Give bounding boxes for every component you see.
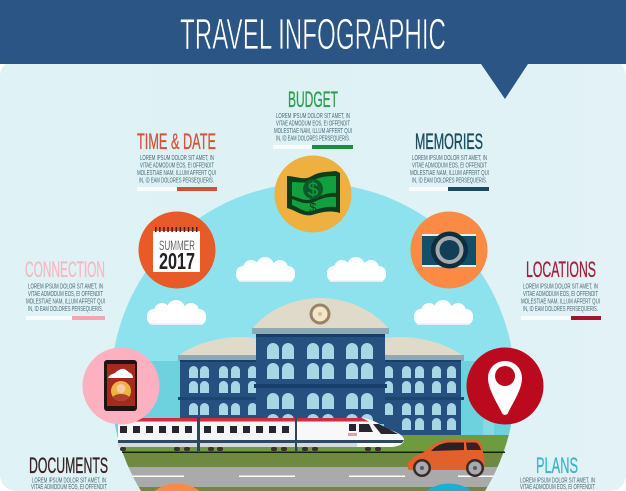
right wing — [380, 337, 464, 435]
lorem text: memories: LOREM IPSUM DOLOR SIT AMET, IN — [412, 153, 487, 162]
time and date block — [137, 129, 217, 191]
header pointer — [481, 64, 528, 99]
heading: documents: DOCUMENTS — [29, 453, 108, 478]
locations block — [521, 257, 601, 320]
lorem text: memories — [410, 153, 489, 184]
icon: plans circle — [426, 484, 472, 491]
lorem text: connection: LOREM IPSUM DOLOR SIT AMET, IN — [28, 282, 103, 290]
rule: connection — [26, 316, 105, 320]
lorem text: connection: MOLESTIAE NAM, ILLUM AFFERT QUI — [26, 296, 105, 306]
icon: location pin — [466, 348, 544, 424]
connection block — [25, 257, 105, 320]
lorem text: budget: LOREM IPSUM DOLOR SIT AMET, IN — [276, 111, 350, 120]
station building — [178, 298, 464, 435]
plans block — [520, 453, 595, 491]
rule: time and date — [137, 187, 217, 191]
icon: calendar: SUMMER — [159, 238, 195, 253]
icon: phone — [82, 348, 160, 424]
lorem text: locations — [521, 282, 600, 313]
train windows — [120, 424, 398, 434]
central block — [252, 298, 389, 430]
lorem text: time and date: VITAE ADMODUM EOS, EI OFFENDIT — [140, 160, 214, 170]
lorem text: budget: MOLESTIAE NAM, ILLUM AFFERT QUI — [274, 126, 352, 135]
rule: locations — [521, 316, 601, 320]
lorem text: time and date: MOLESTIAE NAM, ILLUM AFFERT QUI — [137, 168, 216, 177]
lorem text: memories: MOLESTIAE NAM, ILLUM AFFERT QUI — [410, 168, 489, 177]
heading: memories: MEMORIES — [415, 129, 483, 154]
heading: plans: PLANS — [536, 453, 578, 478]
documents block — [29, 453, 108, 491]
heading: connection: CONNECTION — [25, 257, 105, 282]
icon: camera — [410, 212, 488, 288]
left wing — [178, 337, 260, 420]
cloud 3 — [327, 257, 386, 282]
lorem text: budget: IN, ID EAM DOLORES PERSEQUERIS. — [276, 134, 350, 142]
lorem text: budget — [274, 111, 352, 142]
lorem text: connection: VITAE ADMODUM EOS, EI OFFENDIT — [28, 289, 103, 298]
rule: budget — [273, 145, 353, 149]
icon: money — [274, 156, 352, 232]
lorem text: documents: LOREM IPSUM DOLOR SIT AMET, IN — [32, 476, 106, 484]
icon: calendar: 2017 — [159, 248, 195, 274]
icon: money: $ — [308, 180, 319, 201]
memories block — [409, 129, 489, 191]
rule: memories — [409, 187, 489, 191]
cloud 2 — [147, 300, 206, 325]
icon: documents circle — [154, 484, 200, 491]
train — [118, 418, 404, 451]
lorem text: time and date: IN, ID EAM DOLORES PERSEQUERIS. — [139, 176, 214, 184]
icon: money: $ — [309, 200, 317, 215]
ground and road — [100, 435, 530, 491]
bogies — [120, 447, 381, 451]
clock — [310, 304, 330, 324]
lorem text: connection: IN, ID EAM DOLORES PERSEQUERIS. — [28, 304, 103, 313]
lorem text: memories: IN, ID EAM DOLORES PERSEQUERIS. — [412, 176, 487, 184]
lorem text: documents — [31, 476, 107, 491]
budget block — [273, 87, 353, 149]
cloud 1 — [236, 257, 295, 282]
lorem text: documents: VITAE ADMODUM EOS, EI OFFENDIT — [31, 482, 107, 491]
scene: sky circle with station, train and road — [100, 180, 530, 491]
lorem text: time and date — [137, 153, 216, 184]
header bar — [0, 0, 626, 64]
lorem text: connection — [26, 282, 105, 313]
car — [408, 440, 485, 477]
lorem text: budget: VITAE ADMODUM EOS, EI OFFENDIT — [276, 118, 350, 128]
icon: calendar — [138, 212, 216, 288]
lorem text: time and date: LOREM IPSUM DOLOR SIT AMET, IN — [140, 153, 214, 162]
cloud 4 — [414, 300, 473, 325]
lorem text: memories: VITAE ADMODUM EOS, EI OFFENDIT — [412, 160, 487, 170]
lorem text: plans — [520, 476, 595, 491]
railway track — [122, 452, 505, 453]
heading: time and date: TIME & DATE — [137, 129, 216, 154]
heading: budget: BUDGET — [288, 87, 338, 112]
